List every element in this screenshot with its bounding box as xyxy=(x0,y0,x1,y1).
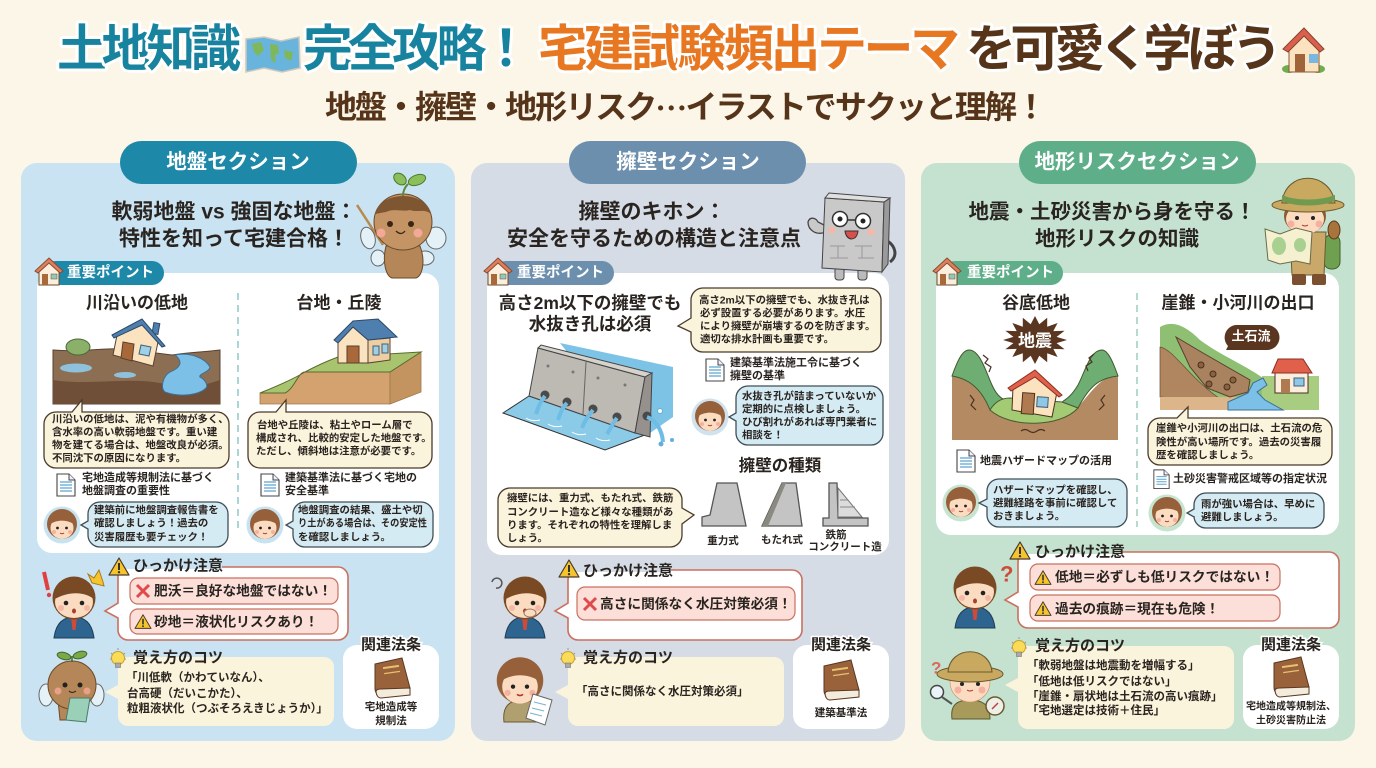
character: seed with notepad xyxy=(39,650,104,722)
speech bubble: lowland explanation: 含水率の高い軟弱地盤です。重い建 xyxy=(52,426,218,438)
diagram: leaning wall: もたれ式 xyxy=(761,533,803,546)
panel: terrain risk section xyxy=(921,141,1355,741)
panel heading: 安全を守るための構造と注意点 xyxy=(507,228,801,250)
title: を可愛く学ぼう xyxy=(966,21,1282,77)
related law card: 関連法条 xyxy=(1261,636,1321,654)
diagram: gravity wall xyxy=(702,483,746,547)
badge: key points: 重要ポイント xyxy=(517,264,604,281)
column: valley lowland xyxy=(942,294,1127,527)
related law card: 関連法条 xyxy=(361,636,421,654)
memory tip block: 覚え方のコツ xyxy=(133,648,223,666)
speech bubble: debris flow explanation: 険性が高い場所です。過去の災害履 xyxy=(1156,436,1322,448)
illustration: house on plateau xyxy=(260,319,421,404)
advisor tip: 定期的に点検しましょう。 xyxy=(742,402,866,416)
memory tip block: 「宅地選定は技術＋住民」 xyxy=(1027,703,1165,717)
advisor tip: 相談を！ xyxy=(742,428,784,442)
illustration: flooded lowland xyxy=(53,319,220,404)
column: talus and stream outlet: 崖錐・小河川の出口 xyxy=(1162,294,1314,312)
icon: world map xyxy=(246,37,300,72)
speech bubble: debris flow explanation: 歴を確認しましょう。 xyxy=(1156,448,1259,462)
advisor tip: 雨が強い場合は、早めに xyxy=(1201,498,1315,510)
icon: law book xyxy=(1274,657,1309,697)
diagram: gravity wall: 重力式 xyxy=(707,534,739,547)
legal note xyxy=(285,470,417,497)
legal note: 擁壁の基準 xyxy=(730,368,785,382)
character: girl with notes xyxy=(497,657,552,725)
memory tip block: 「高さに関係なく水圧対策必須」 xyxy=(576,684,748,698)
speech bubble: wall types explanation: 擁壁には、重力式、もたれ式、鉄筋 xyxy=(507,492,673,504)
advisor tip: り土がある場合は、その安定性 xyxy=(298,516,428,530)
memory tip block xyxy=(497,648,784,726)
column: plateau and hills: 台地・丘陵 xyxy=(296,292,382,312)
speech bubble: wall types explanation: コンクリート造など様々な種類があ xyxy=(507,506,673,518)
warning item: fertile land xyxy=(130,578,338,604)
mascot: seed pointing xyxy=(357,171,446,278)
legal note xyxy=(82,470,214,497)
heading: wall types: 擁壁の種類 xyxy=(739,456,822,475)
icon: document xyxy=(957,450,975,472)
memory tip block: 覚え方のコツ xyxy=(583,648,673,666)
icon: document xyxy=(261,474,279,496)
section pill: 地盤セクション xyxy=(166,150,310,174)
panel heading xyxy=(968,200,1256,250)
panel heading: 特性を知って宅建合格！ xyxy=(119,228,349,250)
trap warning block: ひっかけ注意 xyxy=(583,562,673,580)
character: puzzled student: ? xyxy=(1000,562,1013,586)
badge: key points: 重要ポイント xyxy=(967,264,1054,281)
speech bubble: plateau explanation: ただし、傾斜地は注意が必要です。 xyxy=(256,444,421,458)
column: riverside lowland xyxy=(44,294,229,547)
warning item: low land xyxy=(1030,564,1280,590)
advisor tip: を確認しましょう。 xyxy=(298,530,391,544)
burst: earthquake label xyxy=(1003,316,1067,364)
advisor tip xyxy=(44,502,228,547)
section pill xyxy=(569,141,806,184)
title xyxy=(57,21,1325,77)
icon: house xyxy=(1282,28,1325,73)
heading: drain holes required xyxy=(499,293,681,334)
warning item: sandy land: 砂地＝液状化リスクあり！ xyxy=(154,614,318,630)
heading: drain holes required: 高さ2m以下の擁壁でも xyxy=(499,293,681,313)
trap warning block: ひっかけ注意 xyxy=(1035,542,1125,560)
diagram: reinforced concrete wall xyxy=(808,483,882,553)
legal note: 土砂災害警戒区域等の指定状況 xyxy=(1173,471,1327,485)
advisor tip xyxy=(1148,493,1324,532)
speech bubble: plateau explanation xyxy=(248,400,432,468)
legal note: 地震ハザードマップの活用 xyxy=(980,453,1112,467)
memory tip block: 粒粗液状化（つぶそろえきじょうか）」 xyxy=(127,701,328,715)
warning item: water pressure xyxy=(577,587,795,620)
column: talus and stream outlet xyxy=(1148,294,1332,532)
subtitle: 地盤・擁壁・地形リスク…イラストでサクッと理解！ xyxy=(325,84,1047,130)
memory tip block: 「崖錐・扇状地は土石流の高い痕跡」 xyxy=(1027,689,1222,703)
advisor tip: 建築前に地盤調査報告書を xyxy=(94,504,219,516)
panel heading: 地震・土砂災害から身を守る！ xyxy=(968,200,1256,224)
memory tip block xyxy=(39,648,334,726)
speech bubble: plateau explanation: 構成され、比較的安定した地盤です。 xyxy=(256,432,432,444)
advisor tip: 避難しましょう。 xyxy=(1201,510,1284,524)
icon: law book xyxy=(375,658,410,698)
warning item: fertile land: 肥沃＝良好な地盤ではない！ xyxy=(154,582,332,598)
trap warning block: ひっかけ注意 xyxy=(133,556,223,574)
trap warning block xyxy=(44,556,348,640)
advisor tip: おきましょう。 xyxy=(993,510,1065,522)
illustration: debris flow xyxy=(1160,324,1319,410)
memory tip block: 「低地は低リスクではない」 xyxy=(1027,674,1176,688)
legal note: 宅地造成等規制法に基づく xyxy=(82,470,214,484)
panel heading xyxy=(111,200,357,250)
warning item: past traces xyxy=(1030,595,1280,621)
legal note: 建築基準法に基づく宅地の xyxy=(285,470,417,484)
character: surprised student xyxy=(44,570,104,638)
advisor tip xyxy=(246,502,433,547)
memory tip block: 「軟弱地盤は地震動を増幅する」 xyxy=(1027,658,1200,672)
speech bubble: lowland explanation: 物を建てる場合は、地盤改良が必須。 xyxy=(52,438,229,452)
advisor tip: ハザードマップを確認し、 xyxy=(993,484,1118,496)
speech bubble: drain hole explanation: により擁壁が崩壊するのを防ぎます。 xyxy=(700,320,875,332)
icon: law book xyxy=(824,660,859,700)
character: explorer with magnifier xyxy=(930,652,1004,719)
column: riverside lowland: 川沿いの低地 xyxy=(86,294,188,312)
section pill xyxy=(1019,141,1256,184)
icon: document xyxy=(706,359,724,381)
title: 土地知識 xyxy=(57,21,241,77)
speech bubble: drain hole explanation: 高さ2m以下の擁壁でも、水抜き孔は xyxy=(699,294,870,306)
panel heading: 擁壁のキホン： xyxy=(578,200,726,224)
column: plateau and hills xyxy=(246,292,433,547)
memory tip block: 覚え方のコツ xyxy=(1035,636,1125,654)
related law card: 土砂災害防止法 xyxy=(1256,714,1326,726)
related law card: 建築基準法 xyxy=(815,706,868,719)
related law card xyxy=(1243,636,1339,729)
warning item: low land: 低地＝必ずしも低リスクではない！ xyxy=(1055,568,1274,584)
speech bubble: drain hole explanation: 必ず設置する必要があります。水圧 xyxy=(700,306,865,320)
diagram: reinforced concrete wall: 鉄筋 xyxy=(826,528,847,541)
legal note xyxy=(730,355,862,382)
related law card: 関連法条 xyxy=(811,636,871,654)
bubble: debris flow label xyxy=(1225,325,1280,350)
related law card xyxy=(343,636,439,729)
speech bubble: drain hole explanation xyxy=(678,288,881,352)
key points card xyxy=(37,273,439,553)
mascot: explorer with map xyxy=(1265,178,1344,285)
mascot: retaining wall with glasses xyxy=(808,193,895,280)
related law card: 規制法 xyxy=(375,714,407,727)
advisor tip: 災害履歴も要チェック！ xyxy=(94,530,208,544)
badge: key points xyxy=(484,258,614,285)
title: 宅建試験頻出テーマ xyxy=(538,21,960,77)
speech bubble: plateau explanation: 台地や丘陵は、粘土やローム層で xyxy=(257,418,413,432)
speech bubble: debris flow explanation xyxy=(1148,407,1332,465)
panel: retaining wall section xyxy=(471,141,905,741)
speech bubble: wall types explanation: しょう。 xyxy=(507,532,548,544)
column: valley lowland: 谷底低地 xyxy=(1002,294,1070,312)
bubble: debris flow label: 土石流 xyxy=(1231,328,1271,344)
speech bubble: debris flow explanation: 崖錐や小河川の出口は、土石流の危 xyxy=(1156,422,1323,434)
diagram: reinforced concrete wall: コンクリート造 xyxy=(808,541,882,553)
badge: key points xyxy=(933,258,1063,285)
advisor tip xyxy=(692,386,883,445)
legal note: 安全基準 xyxy=(285,483,329,497)
speech bubble: lowland explanation: 不同沈下の原因になります。 xyxy=(52,452,186,464)
badge: key points xyxy=(35,258,164,285)
warning item: sandy land xyxy=(130,609,338,634)
key points card xyxy=(487,273,889,555)
legal note: 建築基準法施工令に基づく xyxy=(730,355,862,369)
speech bubble: lowland explanation: 川沿いの低地は、泥や有機物が多く、 xyxy=(52,412,229,426)
key points card xyxy=(936,273,1339,535)
memory tip block: 「川低軟（かわていなん）、 xyxy=(126,670,270,684)
related law card: 宅地造成等規制法、 xyxy=(1246,700,1336,712)
related law card: 宅地造成等 xyxy=(365,700,418,713)
advisor tip: 避難経路を事前に確認して xyxy=(993,496,1117,510)
section pill xyxy=(120,141,357,184)
icon: document xyxy=(1154,470,1169,489)
warning item: past traces: 過去の痕跡＝現在も危険！ xyxy=(1055,600,1219,616)
character: puzzled student xyxy=(954,562,1013,628)
burst: earthquake label: 地震 xyxy=(1018,332,1052,350)
trap warning block xyxy=(954,542,1339,628)
illustration: earthquake in valley xyxy=(952,316,1118,440)
diagram: leaning wall xyxy=(761,483,803,546)
trap warning block xyxy=(492,560,802,640)
heading: drain holes required: 水抜き孔は必須 xyxy=(529,314,652,334)
advisor tip: 地盤調査の結果、盛土や切 xyxy=(298,504,423,516)
panel heading: 地形リスクの知識 xyxy=(1035,228,1199,250)
advisor tip: 水抜き孔が詰まっていないか xyxy=(742,390,877,402)
speech bubble: lowland explanation xyxy=(44,400,229,468)
warning item: water pressure: 高さに関係なく水圧対策必須！ xyxy=(600,596,792,612)
speech bubble: wall types explanation: ります。それぞれの特性を理解しま xyxy=(507,518,672,532)
memory tip block: 台高硬（だいこかた）、 xyxy=(127,686,248,700)
panel: ground section xyxy=(21,141,455,741)
speech bubble: wall types explanation xyxy=(498,488,694,547)
advisor tip xyxy=(942,479,1127,527)
panel heading xyxy=(507,200,801,250)
panel heading: 軟弱地盤 vs 強固な地盤： xyxy=(111,200,357,224)
speech bubble: drain hole explanation: 適切な排水計画も重要です。 xyxy=(700,332,834,346)
illustration: retaining wall with drain holes xyxy=(503,343,674,450)
badge: key points: 重要ポイント xyxy=(67,264,154,281)
related law card xyxy=(793,636,889,729)
section pill: 擁壁セクション xyxy=(616,150,760,174)
character: worried student xyxy=(492,576,546,638)
memory tip block xyxy=(930,636,1234,729)
character: explorer with magnifier: ? xyxy=(931,658,941,678)
advisor tip: 確認しましょう！過去の xyxy=(94,516,208,530)
advisor tip: ひび割れがあれば専門業者に xyxy=(742,416,877,428)
title: 完全攻略！ xyxy=(303,21,531,77)
section pill: 地形リスクセクション xyxy=(1034,150,1240,174)
legal note: 地盤調査の重要性 xyxy=(82,483,170,497)
icon: document xyxy=(57,474,75,496)
